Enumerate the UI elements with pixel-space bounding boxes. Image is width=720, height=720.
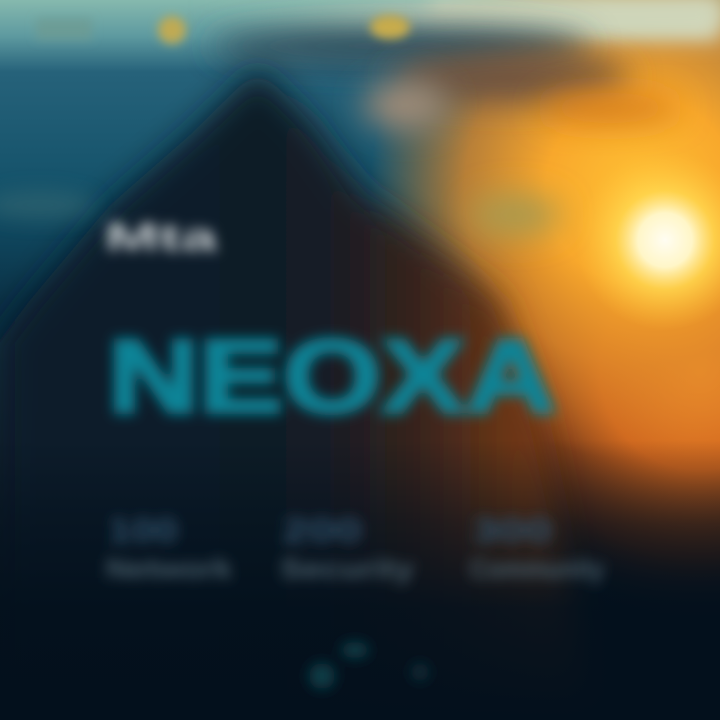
title: NEOXA: NEOXA	[108, 319, 556, 435]
stat column 3	[470, 512, 604, 584]
stat 2 label: Security	[280, 553, 415, 584]
stat 3 value: 300	[472, 512, 552, 550]
stat 1 value: 100	[108, 512, 178, 550]
foreground fade	[0, 440, 720, 720]
stat 3 label: Community	[470, 553, 604, 584]
mountain silhouette	[0, 68, 590, 720]
top decorative logos	[36, 15, 410, 44]
stat 2 value: 200	[282, 512, 362, 550]
stat column 1	[106, 512, 232, 584]
stat 1 label: Network	[106, 553, 232, 584]
footer icons	[309, 642, 429, 689]
brand tagline: Mta	[105, 217, 218, 259]
sun	[575, 150, 720, 330]
left ridge haze	[0, 191, 95, 219]
stat column 2	[280, 512, 415, 584]
